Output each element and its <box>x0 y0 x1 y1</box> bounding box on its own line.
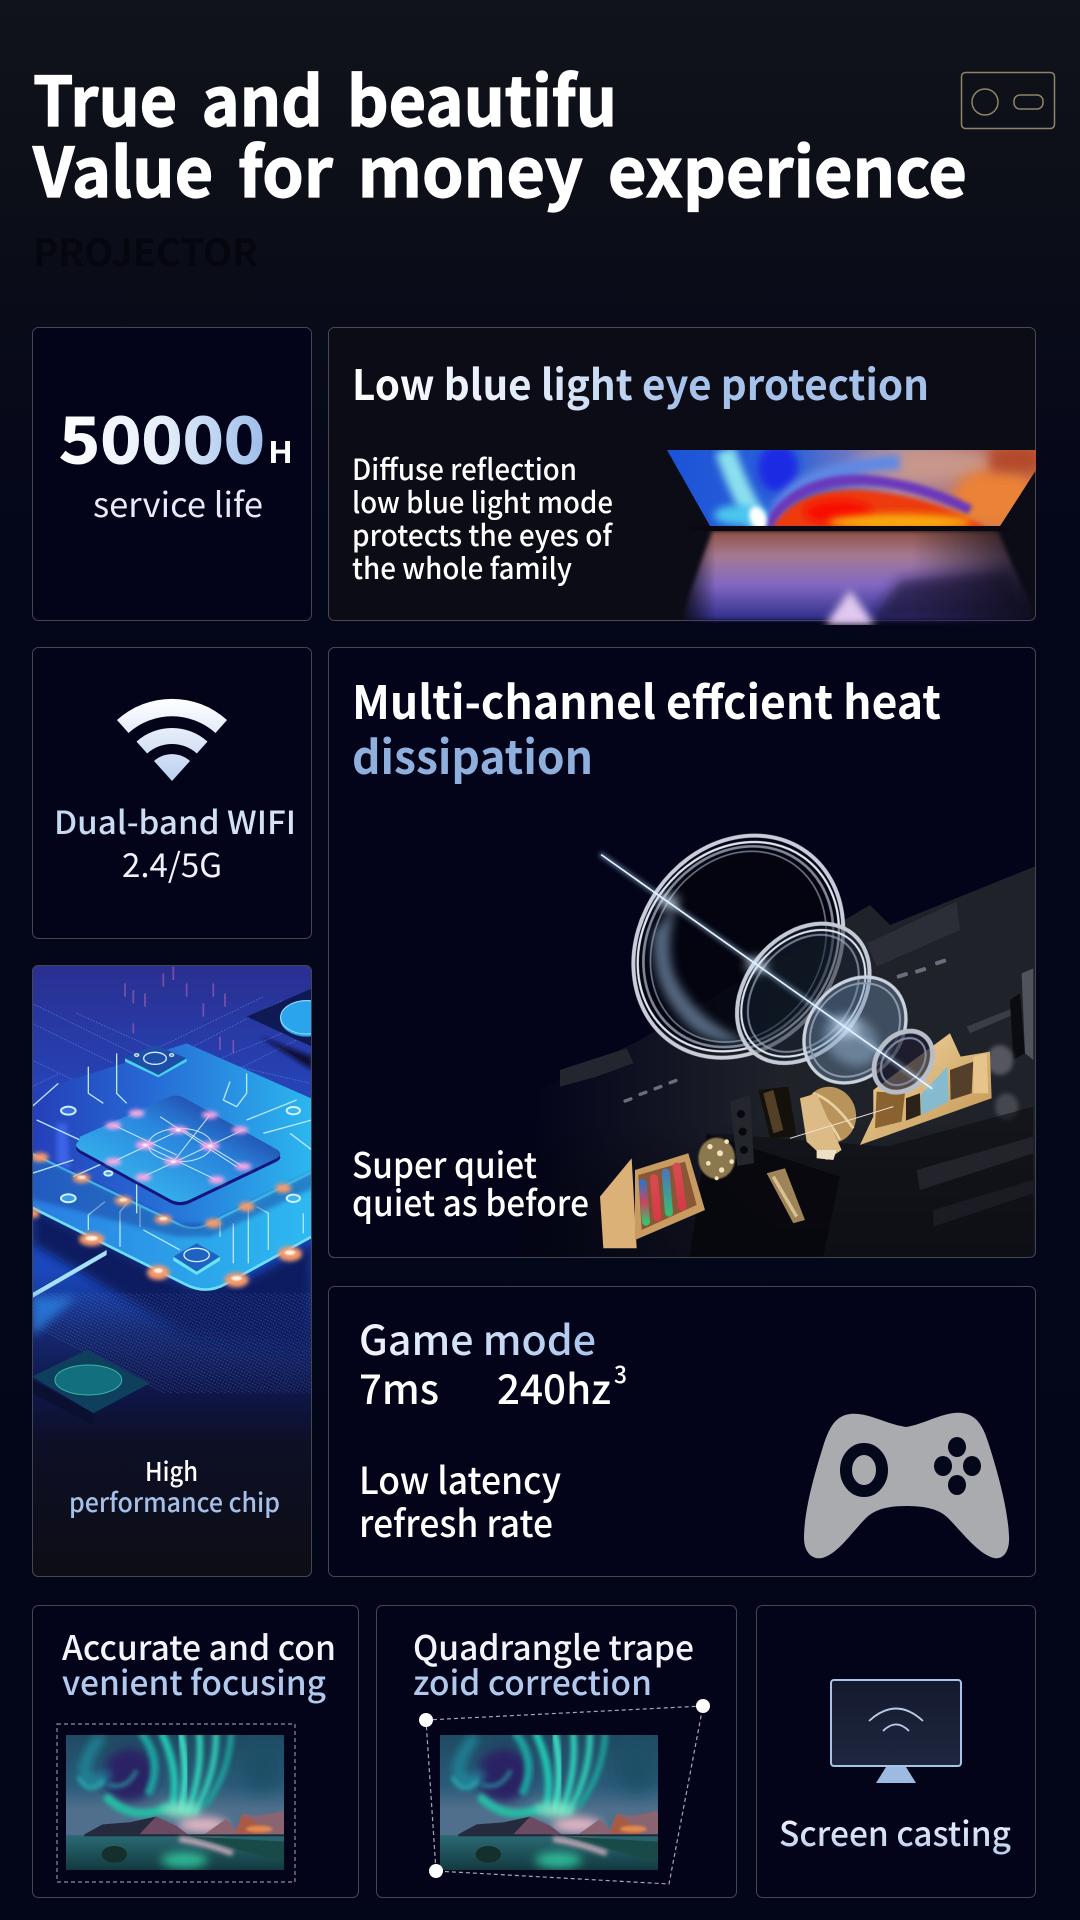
panel: trapezoid correction <box>376 1606 736 1898</box>
stat: 50000H: H <box>268 428 293 472</box>
panel: service life <box>32 328 312 620</box>
heading: heat dissipation: Multi-channel effcient heat <box>352 667 941 733</box>
subtitle: projector: PROJECTOR <box>33 223 258 277</box>
caption: high performance chip: High <box>145 1452 198 1489</box>
heading: accurate and convenient focusing: venient focusing <box>62 1656 326 1705</box>
image: aurora landscape <box>440 1735 658 1870</box>
heading: low blue light eye protection: Low blue light eye protection <box>352 352 929 413</box>
illustration: chip layers <box>0 967 333 1425</box>
text: super quiet: quiet as before <box>352 1176 589 1227</box>
text: 2.4/5G: 2.4/5G <box>122 839 222 887</box>
illustration: projector optics <box>560 833 1036 1258</box>
caption: service life: service life <box>93 478 263 527</box>
specs: 7ms 240hz: 7ms <box>359 1356 439 1416</box>
panel: focusing <box>32 1606 358 1898</box>
panel: game mode <box>328 1286 1036 1576</box>
heading: accurate and convenient focusing: Accurate and con <box>62 1621 336 1670</box>
icon: wifi <box>117 699 227 781</box>
beam <box>602 855 932 1088</box>
panel: wifi <box>32 648 312 938</box>
caption: high performance chip: performance chip <box>69 1483 280 1520</box>
specs: 7ms 240hz: 240hz <box>497 1356 611 1416</box>
panel: high performance chip <box>32 965 312 1577</box>
heading: quadrangle trapezoid correction: zoid correction <box>413 1656 652 1705</box>
icon: monitor with cast signal <box>831 1680 961 1783</box>
heading: heat dissipation: dissipation <box>352 722 593 788</box>
caption: high performance chip <box>69 1452 280 1520</box>
text: description <box>352 447 613 588</box>
heading: quadrangle trapezoid correction: Quadrangle trape <box>413 1621 694 1670</box>
text: description: low blue light mode <box>352 480 613 522</box>
title: Value for money experience <box>32 118 967 217</box>
heading: quadrangle trapezoid correction <box>413 1621 694 1705</box>
heading: accurate and convenient focusing <box>62 1621 336 1705</box>
icon: projector logo <box>962 72 1054 128</box>
text: super quiet: Super quiet <box>352 1138 537 1189</box>
text: description: the whole family <box>352 546 572 588</box>
parts: gold assembly <box>600 1033 992 1248</box>
specs: 7ms 240hz: 3 <box>614 1355 627 1390</box>
text: low latency refresh rate: refresh rate <box>359 1494 553 1548</box>
text: description: Diffuse reflection <box>352 447 577 489</box>
panel: low blue light <box>328 328 1040 625</box>
title <box>32 47 967 217</box>
heading: game mode: Game mode <box>359 1307 596 1367</box>
stat: 50000H: 50000 <box>59 390 265 482</box>
text: low latency refresh rate: Low latency <box>359 1451 561 1505</box>
icon: gamepad <box>804 1413 1009 1558</box>
heading: heat dissipation <box>352 667 941 788</box>
text: description: protects the eyes of <box>352 513 613 555</box>
image: aurora landscape <box>66 1735 284 1870</box>
specs: 7ms 240hz <box>359 1355 627 1416</box>
lenses <box>631 833 935 1095</box>
text: screen casting: Screen casting <box>779 1807 1011 1856</box>
panel: heat dissipation <box>328 648 1036 1258</box>
text: dual-band wifi: Dual-band WIFI <box>54 798 296 844</box>
image: screen with reflection <box>660 444 1040 625</box>
panel: screen casting <box>756 1606 1036 1898</box>
dashed quad frame with handles <box>419 1699 710 1884</box>
text: low latency refresh rate <box>359 1451 561 1548</box>
title: True and beautifu <box>33 47 617 146</box>
text: super quiet <box>352 1138 589 1227</box>
dashed focus frame <box>57 1724 295 1882</box>
